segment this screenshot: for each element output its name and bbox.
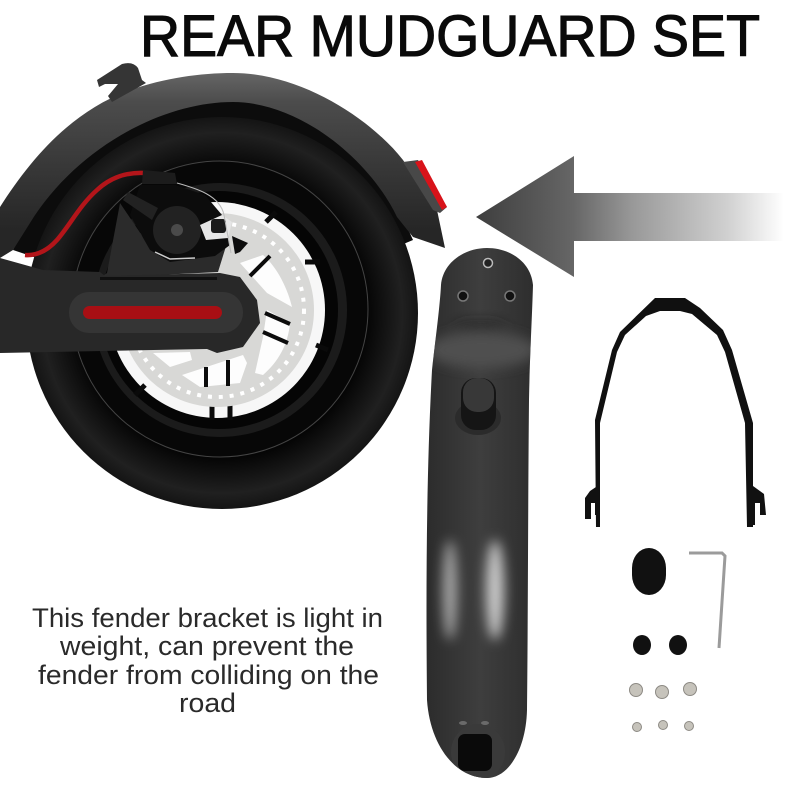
icon: swing arm <box>0 258 260 353</box>
bottom socket <box>454 721 492 778</box>
small plugs <box>633 635 687 655</box>
left foot <box>585 487 599 519</box>
wheel spokes <box>206 256 290 387</box>
right foot <box>750 486 766 525</box>
hex key <box>689 553 725 648</box>
highlights <box>427 322 537 640</box>
title: REAR MUDGUARD SET <box>140 4 760 69</box>
mount knob <box>455 378 501 435</box>
icon: tail light <box>403 160 447 213</box>
description text <box>32 603 383 718</box>
small screws <box>632 720 694 732</box>
disc windows <box>153 255 292 387</box>
description text: fender from colliding on the <box>38 660 379 690</box>
rubber plug <box>632 548 666 595</box>
description text: road <box>179 688 236 718</box>
bracket <box>585 298 766 527</box>
icon: rim <box>72 161 368 457</box>
icon: tyre <box>26 117 418 509</box>
wheel assembly photo <box>0 63 447 509</box>
arrow <box>476 156 790 277</box>
icon: fender clip <box>97 63 146 102</box>
description text: This fender bracket is light in <box>32 603 383 633</box>
large screws <box>630 682 696 698</box>
mudguard <box>427 248 537 780</box>
icon: brake caliper <box>100 170 232 278</box>
icon: fender <box>0 73 445 258</box>
mounting holes <box>458 258 515 301</box>
icon: brake disc <box>109 202 328 420</box>
description text: weight, can prevent the <box>59 631 354 661</box>
icon: red cable <box>25 173 145 255</box>
fender underside <box>13 90 413 320</box>
caliper plate <box>100 203 227 278</box>
